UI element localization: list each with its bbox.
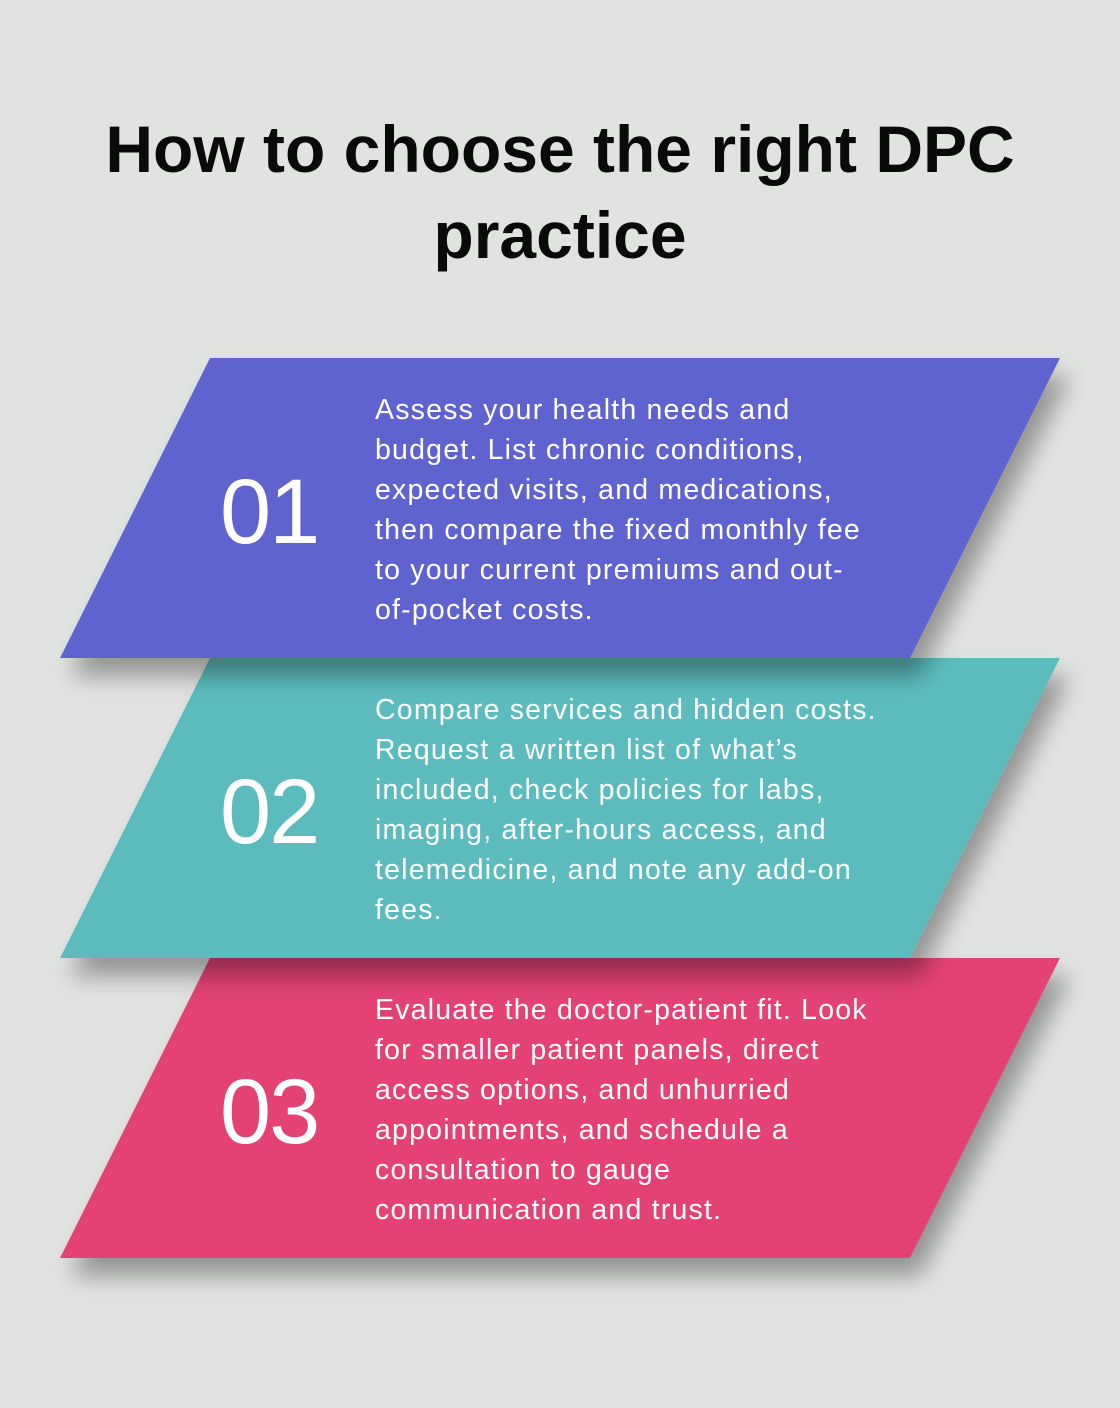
number 02: 02 (220, 761, 318, 863)
text: step 2: Compare services and hidden costs. (375, 694, 877, 726)
text: step 3: for smaller patient panels, direct (375, 1034, 820, 1066)
text: step 1: of-pocket costs. (375, 594, 594, 626)
text: step 2: Request a written list of what’s (375, 734, 798, 766)
text: step 2: included, check policies for labs, (375, 774, 825, 806)
text: step 1: Assess your health needs and (375, 394, 790, 426)
text: step 1: budget. List chronic conditions, (375, 434, 805, 466)
number 03: 03 (220, 1061, 318, 1163)
text: step 2: fees. (375, 894, 443, 926)
text: step 1: expected visits, and medications, (375, 474, 833, 506)
panel: step 2 (60, 658, 1060, 958)
title: How to choose the right DPC (105, 112, 1015, 186)
number 01: 01 (220, 461, 318, 563)
text: step 2: telemedicine, and note any add-on (375, 854, 852, 886)
text: step 2: imaging, after-hours access, and (375, 814, 827, 846)
panel: step 3 (60, 958, 1060, 1258)
text: step 3: appointments, and schedule a (375, 1114, 789, 1146)
text: step 3: communication and trust. (375, 1194, 722, 1226)
text: step 2 (375, 694, 877, 926)
panel: step 1 (60, 358, 1060, 658)
text: step 3: access options, and unhurried (375, 1074, 790, 1106)
text: step 3: consultation to gauge (375, 1154, 671, 1186)
title (105, 112, 1015, 272)
text: step 1: then compare the fixed monthly fee (375, 514, 861, 546)
text: step 1: to your current premiums and out- (375, 554, 844, 586)
title: practice (433, 198, 687, 272)
text: step 1 (375, 394, 861, 626)
text: step 3 (375, 994, 868, 1226)
text: step 3: Evaluate the doctor-patient fit. Look (375, 994, 868, 1026)
